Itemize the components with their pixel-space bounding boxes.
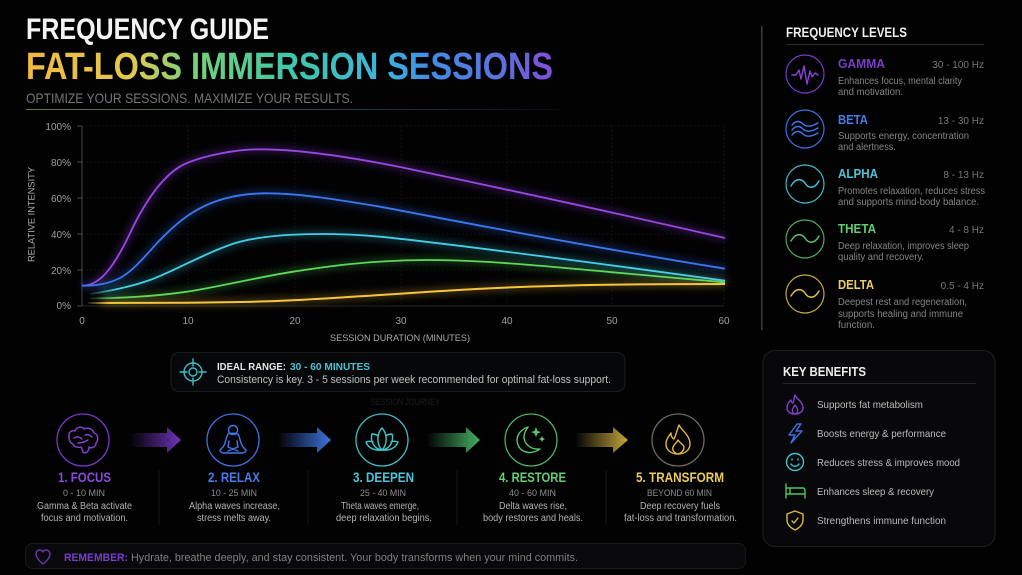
delta row: supports healing and immune: [838, 309, 963, 320]
y axis labels: 40%: [51, 230, 71, 241]
step 5: transform: Deep recovery fuels: [640, 501, 720, 512]
x axis title: SESSION DURATION (MINUTES): [330, 333, 470, 344]
heading: key benefits: KEY BENEFITS: [783, 364, 866, 379]
reminder bar: Hydrate, breathe deeply, and stay consistent. Your body transforms when your mind commits.: [131, 552, 578, 564]
gamma row: GAMMA: [838, 57, 885, 71]
beta row: and alertness.: [838, 142, 896, 153]
theta row: 4 - 8 Hz: [949, 225, 984, 236]
arrow 2: [278, 427, 331, 453]
curve: alpha: [90, 234, 725, 294]
x axis labels: 10: [182, 316, 194, 327]
benefit: mood: [786, 454, 960, 470]
y axis title: RELATIVE INTENSITY: [26, 166, 38, 262]
gamma row: 30 - 100 Hz: [932, 60, 984, 71]
step 2: relax: 10 - 25 MIN: [211, 488, 257, 499]
alpha row: ALPHA: [838, 167, 878, 181]
step 4: restore: 40 - 60 MIN: [509, 488, 556, 499]
theta row: THETA: [838, 222, 876, 236]
benefit: fat metabolism: [787, 395, 923, 414]
step 1: focus: 1. FOCUS: [58, 469, 111, 485]
delta row: DELTA: [838, 278, 874, 292]
x axis labels: 0: [79, 316, 85, 327]
icon: flame: [666, 425, 690, 454]
step 1: focus: Gamma & Beta activate: [37, 501, 132, 512]
line chart: relative intensity over session duration: [26, 122, 730, 344]
x axis labels: 50: [606, 316, 618, 327]
delta row: 0.5 - 4 Hz: [941, 281, 984, 292]
benefit: fat metabolism: Supports fat metabolism: [817, 399, 923, 411]
icon: target: [180, 359, 206, 385]
x axis labels: 20: [289, 316, 301, 327]
step 1: focus: 0 - 10 MIN: [63, 488, 105, 499]
title line 2: FAT-LOSS IMMERSION SESSIONS: [26, 46, 553, 88]
x axis labels: 30: [395, 316, 407, 327]
faint section label: SESSION JOURNEY: [371, 397, 440, 407]
y axis labels: [45, 122, 71, 312]
icon: heart: [36, 550, 50, 564]
beta row: [786, 110, 984, 153]
beta row: 13 - 30 Hz: [938, 116, 984, 127]
icon: meditation: [220, 426, 246, 453]
step 2: relax: stress melts away.: [197, 513, 271, 524]
alpha row: [786, 165, 985, 208]
step 4: restore: 4. RESTORE: [499, 469, 566, 485]
benefit: mood: Reduces stress & improves mood: [817, 457, 960, 469]
benefit: energy: Boosts energy & performance: [817, 428, 946, 440]
icon: lotus: [366, 428, 398, 450]
delta row: function.: [838, 320, 875, 331]
callout: ideal range: [171, 352, 625, 392]
gamma row: Enhances focus, mental clarity: [838, 76, 962, 87]
curve: gamma: [82, 149, 725, 286]
benefit: immune: Strengthens immune function: [817, 515, 946, 527]
panel: frequency levels: [761, 25, 985, 331]
step 5: transform: [624, 414, 737, 524]
icon: brain: [69, 427, 98, 453]
y axis labels: 60%: [51, 194, 71, 205]
alpha row: Promotes relaxation, reduces stress: [838, 186, 985, 197]
beta row: Supports energy, concentration: [838, 131, 969, 142]
delta row: Deepest rest and regeneration,: [838, 297, 967, 308]
theta row: quality and recovery.: [838, 252, 924, 263]
gamma row: [786, 55, 984, 98]
y axis labels: 100%: [45, 122, 71, 133]
step 4: restore: body restores and heals.: [483, 513, 583, 524]
x axis labels: 40: [501, 316, 513, 327]
heading: frequency levels: FREQUENCY LEVELS: [786, 25, 907, 40]
alpha row: 8 - 13 Hz: [943, 170, 984, 181]
step 3: deepen: [336, 414, 432, 524]
step 4: restore: [483, 414, 583, 524]
curve glows: [82, 149, 725, 303]
step 2: relax: Alpha waves increase,: [189, 501, 280, 512]
theta row: [786, 220, 984, 263]
curve: theta: [90, 260, 725, 298]
step 1: focus: focus and motivation.: [41, 513, 128, 524]
callout: ideal range: 30 - 60 MINUTES: [290, 361, 370, 373]
step 1: focus: [37, 414, 132, 524]
x axis labels: 60: [718, 316, 730, 327]
curve: beta: [82, 193, 725, 286]
reminder bar: [26, 544, 746, 568]
y axis labels: 80%: [51, 158, 71, 169]
title line 1: FREQUENCY GUIDE: [26, 13, 269, 46]
panel: key benefits: [763, 350, 995, 546]
gamma row: and motivation.: [838, 87, 903, 98]
alpha row: and supports mind-body balance.: [838, 197, 979, 208]
step 3: deepen: Theta waves emerge,: [341, 501, 419, 512]
step 4: restore: Delta waves rise,: [499, 501, 567, 512]
arrow 3: [427, 427, 480, 453]
step 5: transform: fat-loss and transformation.: [624, 513, 737, 524]
theta row: Deep relaxation, improves sleep: [838, 241, 969, 252]
subtitle: OPTIMIZE YOUR SESSIONS. MAXIMIZE YOUR RESULTS.: [26, 90, 353, 106]
y axis labels: 0%: [57, 301, 71, 312]
curve: delta: [88, 284, 725, 303]
beta row: BETA: [838, 113, 868, 127]
header: [26, 13, 560, 110]
callout: ideal range: Consistency is key. 3 - 5 sessions per week recommended for optimal fat-loss support.: [217, 374, 611, 386]
step 3: deepen: deep relaxation begins.: [336, 513, 432, 524]
reminder bar: REMEMBER:: [64, 552, 128, 564]
step 5: transform: BEYOND 60 MIN: [647, 488, 712, 499]
arrow 4: [575, 427, 628, 453]
step 2: relax: 2. RELAX: [208, 469, 261, 485]
x axis labels: [79, 316, 730, 327]
step 5: transform: 5. TRANSFORM: [636, 469, 724, 485]
callout: ideal range: IDEAL RANGE:: [217, 361, 286, 373]
benefit: sleep: [786, 484, 935, 498]
icon: moon and stars: [517, 427, 540, 452]
benefit: energy: [789, 424, 946, 443]
step 3: deepen: 25 - 40 MIN: [360, 488, 406, 499]
benefit: sleep: Enhances sleep & recovery: [817, 486, 935, 498]
benefit: immune: [787, 511, 946, 530]
delta row: [786, 275, 984, 331]
arrow 1: [130, 427, 181, 453]
step 2: relax: [189, 414, 280, 524]
y axis labels: 20%: [51, 266, 71, 277]
step 3: deepen: 3. DEEPEN: [353, 469, 414, 485]
